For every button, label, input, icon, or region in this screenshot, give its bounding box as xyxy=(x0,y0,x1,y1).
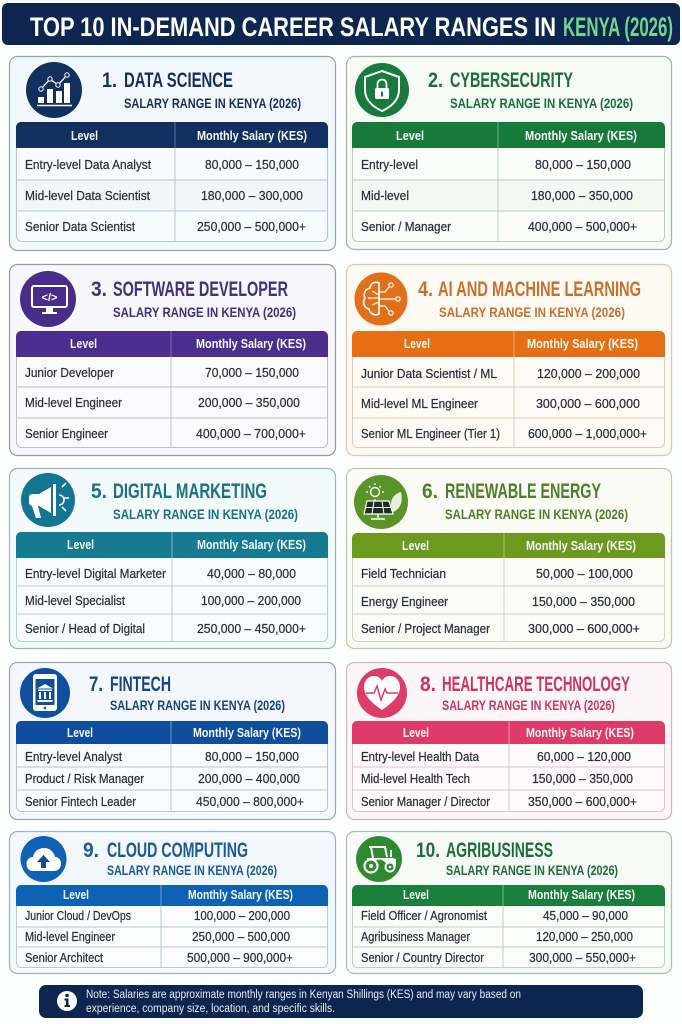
heading: RENEWABLE ENERGY xyxy=(445,480,601,503)
salary table: Mid-level ML Engineer xyxy=(361,397,478,411)
salary table: Level xyxy=(403,888,429,902)
salary table: 150,000 – 350,000 xyxy=(532,595,635,609)
salary table: 40,000 – 80,000 xyxy=(207,567,296,581)
heading: DATA SCIENCE xyxy=(124,69,233,92)
heading: 2. xyxy=(428,69,443,92)
heading: 9. xyxy=(83,839,99,862)
salary table: 80,000 – 150,000 xyxy=(205,750,299,764)
salary table xyxy=(352,533,665,642)
heading: SALARY RANGE IN KENYA (2026) xyxy=(124,95,301,111)
salary table: 100,000 – 200,000 xyxy=(194,909,290,923)
salary table: Monthly Salary (KES) xyxy=(527,337,638,351)
heading: SALARY RANGE IN KENYA (2026) xyxy=(450,95,633,111)
salary table: Senior / Manager xyxy=(361,220,451,234)
salary table: 400,000 – 500,000+ xyxy=(528,220,637,234)
salary table: Senior / Project Manager xyxy=(361,622,490,636)
salary table: Level xyxy=(404,337,430,351)
salary table: Mid-level xyxy=(361,189,409,203)
heading: 5. xyxy=(91,480,107,503)
heading: SALARY RANGE IN KENYA (2026) xyxy=(113,304,296,320)
salary table: Product / Risk Manager xyxy=(25,772,144,786)
salary table: 250,000 – 500,000+ xyxy=(197,220,306,234)
panel: healthcare technology xyxy=(346,662,672,820)
salary table: Mid-level Engineer xyxy=(25,930,115,944)
icon: tractor xyxy=(356,836,402,882)
salary table: 180,000 – 350,000 xyxy=(531,189,633,203)
salary table: Entry-level Data Analyst xyxy=(25,158,151,172)
heading xyxy=(83,839,277,878)
heading: SALARY RANGE IN KENYA (2026) xyxy=(446,862,618,878)
salary table: 80,000 – 150,000 xyxy=(535,158,631,172)
heading: SOFTWARE DEVELOPER xyxy=(113,278,288,301)
salary table: Monthly Salary (KES) xyxy=(526,726,634,740)
title banner: TOP 10 IN-DEMAND CAREER SALARY RANGES IN xyxy=(30,12,556,42)
salary table: 180,000 – 300,000 xyxy=(201,189,303,203)
salary table: 300,000 – 600,000+ xyxy=(528,622,640,636)
heading xyxy=(428,69,633,111)
salary table: 80,000 – 150,000 xyxy=(205,158,299,172)
panel: ai and machine learning xyxy=(346,264,672,456)
panel: data science xyxy=(10,56,336,250)
heading xyxy=(102,69,301,111)
panel: cybersecurity xyxy=(346,56,672,250)
icon: shield with padlock xyxy=(355,63,409,117)
heading: SALARY RANGE IN KENYA (2026) xyxy=(107,862,277,878)
heading: 6. xyxy=(422,480,438,503)
heading: SALARY RANGE IN KENYA (2026) xyxy=(439,304,625,320)
footer note xyxy=(39,985,643,1018)
salary table xyxy=(352,331,665,448)
salary table: Level xyxy=(403,726,429,740)
heading xyxy=(420,673,630,713)
salary table xyxy=(16,122,328,242)
salary table: Agribusiness Manager xyxy=(361,930,470,944)
heading: 8. xyxy=(420,673,436,696)
icon: monitor with code xyxy=(20,271,76,327)
salary table: Junior Cloud / DevOps xyxy=(25,909,131,923)
heading: 7. xyxy=(89,673,103,696)
heading: AGRIBUSINESS xyxy=(446,839,553,862)
salary table: Monthly Salary (KES) xyxy=(197,538,306,552)
heading xyxy=(418,278,641,320)
salary table: Level xyxy=(70,337,97,351)
panel: renewable energy xyxy=(346,468,672,648)
salary table: 150,000 – 350,000 xyxy=(532,772,633,786)
salary table xyxy=(16,532,328,642)
salary table: Junior Data Scientist / ML xyxy=(361,367,497,381)
salary table: 120,000 – 200,000 xyxy=(537,367,640,381)
footer note: experience, company size, location, and specific skills. xyxy=(86,1003,335,1015)
salary table: Level xyxy=(396,129,424,143)
heading: DIGITAL MARKETING xyxy=(113,480,267,503)
salary table: Senior / Head of Digital xyxy=(25,622,145,636)
salary table: 600,000 – 1,000,000+ xyxy=(528,427,647,441)
salary table: Monthly Salary (KES) xyxy=(196,337,306,351)
salary table: Mid-level Engineer xyxy=(25,396,122,410)
icon: info xyxy=(57,991,77,1011)
heading xyxy=(422,480,628,522)
salary table: Level xyxy=(63,888,89,902)
salary table: Senior / Country Director xyxy=(361,951,484,965)
heading xyxy=(91,278,296,320)
salary table: 300,000 – 550,000+ xyxy=(529,951,636,965)
salary table: 400,000 – 700,000+ xyxy=(196,427,306,441)
salary table: 450,000 – 800,000+ xyxy=(196,795,304,809)
salary table: Level xyxy=(67,538,94,552)
salary table: 350,000 – 600,000+ xyxy=(528,795,637,809)
salary table: Entry-level Digital Marketer xyxy=(25,567,166,581)
salary table: Field Technician xyxy=(361,567,446,581)
salary table: 70,000 – 150,000 xyxy=(205,366,299,380)
salary table: 250,000 – 450,000+ xyxy=(197,622,306,636)
salary table: Level xyxy=(71,129,98,143)
heading: CLOUD COMPUTING xyxy=(107,839,248,862)
icon: bar and line chart xyxy=(26,62,82,118)
salary table: 500,000 – 900,000+ xyxy=(187,951,293,965)
salary table: Entry-level xyxy=(361,158,418,172)
salary table: Monthly Salary (KES) xyxy=(528,888,635,902)
icon: sun, solar panel and leaf xyxy=(354,475,408,529)
salary table: 50,000 – 100,000 xyxy=(536,567,633,581)
salary table: Monthly Salary (KES) xyxy=(525,129,637,143)
heading: 4. xyxy=(418,278,433,301)
icon: heart with pulse xyxy=(357,668,407,718)
heading: SALARY RANGE IN KENYA (2026) xyxy=(445,506,628,522)
icon: tablet with bank xyxy=(20,668,70,718)
salary table: Monthly Salary (KES) xyxy=(197,129,307,143)
salary table: Energy Engineer xyxy=(361,595,448,609)
heading: SALARY RANGE IN KENYA (2026) xyxy=(442,697,615,713)
heading xyxy=(89,673,285,713)
heading: 10. xyxy=(416,839,440,862)
salary table: 200,000 – 400,000 xyxy=(198,772,300,786)
salary table: 250,000 – 500,000 xyxy=(192,930,290,944)
icon: megaphone xyxy=(21,473,75,527)
salary table xyxy=(352,721,665,812)
salary table: Senior Engineer xyxy=(25,427,108,441)
salary table xyxy=(16,721,328,812)
footer note: Note: Salaries are approximate monthly ranges in Kenyan Shillings (KES) and may vary based on xyxy=(86,989,521,1001)
heading xyxy=(416,839,618,878)
salary table: Mid-level Health Tech xyxy=(361,772,470,786)
salary table: Senior Data Scientist xyxy=(25,220,135,234)
salary table xyxy=(16,885,328,968)
salary table: Senior Manager / Director xyxy=(361,795,490,809)
salary table: Senior Architect xyxy=(25,951,103,965)
panel: cloud computing xyxy=(10,832,336,974)
salary table: Senior Fintech Leader xyxy=(25,795,136,809)
heading: SALARY RANGE IN KENYA (2026) xyxy=(110,697,285,713)
salary table xyxy=(352,122,665,242)
salary table: Mid-level Specialist xyxy=(25,594,125,608)
heading: 1. xyxy=(102,69,117,92)
salary table: 45,000 – 90,000 xyxy=(543,909,628,923)
salary table: Mid-level Data Scientist xyxy=(25,189,150,203)
salary table: Level xyxy=(402,539,429,553)
salary table: Entry-level Analyst xyxy=(25,750,122,764)
salary table: Junior Developer xyxy=(25,366,114,380)
title banner xyxy=(2,3,680,45)
panel: digital marketing xyxy=(10,468,336,648)
heading: 3. xyxy=(91,278,107,301)
panel: fintech xyxy=(10,662,336,820)
salary table: Entry-level Health Data xyxy=(361,750,479,764)
salary table: Monthly Salary (KES) xyxy=(526,539,636,553)
salary table: Monthly Salary (KES) xyxy=(193,726,301,740)
salary table: Senior ML Engineer (Tier 1) xyxy=(361,427,500,441)
salary table: 60,000 – 120,000 xyxy=(537,750,631,764)
salary table: 300,000 – 600,000 xyxy=(536,397,640,411)
heading: CYBERSECURITY xyxy=(450,69,573,92)
panel: agribusiness xyxy=(346,832,672,974)
salary table: 200,000 – 350,000 xyxy=(198,396,300,410)
icon: cloud with upload arrow xyxy=(20,836,66,882)
panel: software developer xyxy=(10,264,336,456)
salary table: Monthly Salary (KES) xyxy=(188,888,293,902)
heading: SALARY RANGE IN KENYA (2026) xyxy=(113,506,298,522)
salary table: 100,000 – 200,000 xyxy=(201,594,301,608)
heading: FINTECH xyxy=(110,673,171,696)
icon: brain circuit xyxy=(354,272,408,326)
heading xyxy=(91,480,298,522)
icon: monitor with code: </> xyxy=(42,292,57,304)
salary table: Field Officer / Agronomist xyxy=(361,909,487,923)
salary table xyxy=(352,885,665,968)
salary table: 120,000 – 250,000 xyxy=(536,930,633,944)
salary table xyxy=(16,331,328,448)
salary table: Level xyxy=(67,726,93,740)
